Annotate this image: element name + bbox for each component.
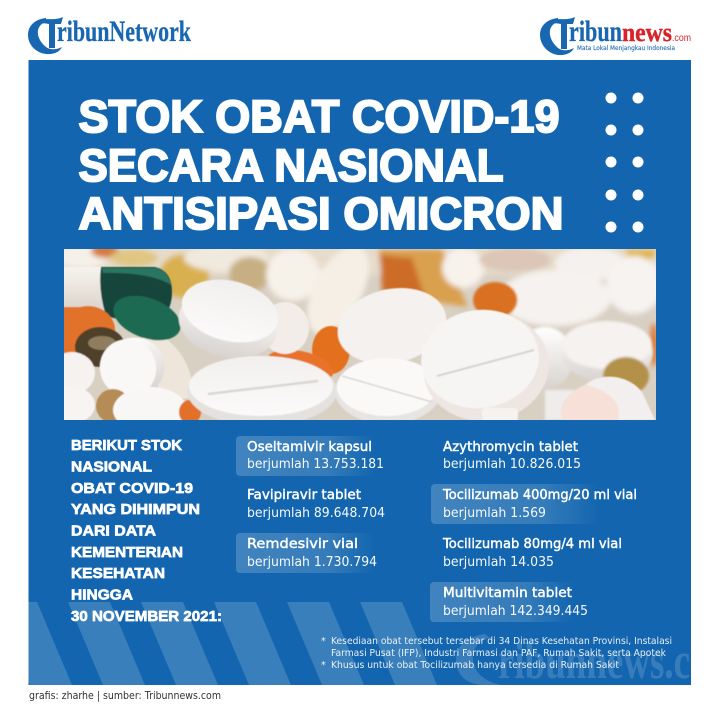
photo: pills — [64, 249, 656, 420]
title: ANTISIPASI OMICRON — [78, 188, 564, 239]
center tablets — [336, 287, 447, 362]
footnotes: * — [321, 660, 326, 671]
item: Azythromycin: Azythromycin tablet — [443, 439, 578, 455]
orange tablet — [80, 306, 116, 332]
footnotes: Khusus untuk obat Tocilizumab hanya tersedia di Rumah Sakit — [331, 660, 619, 671]
logo: Tribunnews: news — [622, 18, 672, 47]
dots decoration — [606, 92, 644, 232]
orange mid — [312, 326, 350, 374]
watermark — [456, 634, 690, 685]
item: Tocilizumab 80mg: berjumlah 14.035 — [443, 554, 554, 570]
pink capsule — [561, 384, 623, 420]
footnotes: * — [321, 636, 326, 647]
item: Tocilizumab 80mg — [442, 536, 622, 570]
intro text: HINGGA — [71, 586, 133, 604]
intro text: BERIKUT STOK — [71, 437, 182, 454]
item: Tocilizumab 80mg: Tocilizumab 80mg/4 ml vial — [442, 536, 622, 552]
intro text: YANG DIHIMPUN — [71, 501, 200, 518]
item: Multivitamin: berjumlah 142.349.445 — [443, 603, 588, 619]
logo: Tribunnews: .com — [672, 33, 691, 44]
intro text — [71, 437, 222, 625]
logo: Tribunnews — [540, 15, 691, 55]
title: STOK OBAT COVID-19 — [78, 91, 560, 142]
intro text: NASIONAL — [71, 458, 152, 476]
left white tablets — [64, 351, 96, 390]
behind white — [269, 302, 310, 355]
item: Remdesivir — [236, 533, 377, 573]
intro text: KESEHATAN — [71, 565, 165, 582]
logo: Tribunnews: Mata Lokal Menjangkau Indonesia — [577, 44, 675, 52]
brown ball — [75, 327, 125, 367]
item: Tocilizumab 400mg: berjumlah 1.569 — [443, 505, 546, 521]
item: Oseltamivir — [236, 436, 384, 476]
item: Favipiravir: berjumlah 89.648.704 — [247, 505, 385, 521]
item: Azythromycin — [443, 439, 581, 472]
footnotes — [321, 636, 672, 671]
item: Tocilizumab 400mg — [431, 484, 637, 524]
title — [78, 91, 564, 239]
intro text: KEMENTERIAN — [71, 544, 183, 561]
item: Multivitamin: Multivitamin tablet — [443, 585, 572, 601]
item: Oseltamivir: berjumlah 13.753.181 — [247, 456, 384, 472]
intro text: DARI DATA — [71, 522, 156, 540]
footnotes: Farmasi Pusat (IFP), Industri Farmasi dan PAF, Rumah Sakit, serta Apotek — [331, 648, 666, 659]
item: Multivitamin — [430, 582, 588, 622]
tablet big top — [178, 306, 274, 358]
logo: TribunNetwork — [28, 15, 191, 54]
item: Tocilizumab 400mg: Tocilizumab 400mg/20 ml vial — [442, 487, 637, 503]
logo: Tribunnews: ribun — [569, 15, 622, 48]
item: Azythromycin: berjumlah 10.826.015 — [443, 456, 581, 472]
item: Remdesivir: berjumlah 1.730.794 — [247, 554, 377, 570]
item: Favipiravir — [247, 487, 385, 521]
item: Oseltamivir: Oseltamivir kapsul — [247, 439, 372, 455]
item: Favipiravir: Favipiravir tablet — [247, 487, 361, 503]
green capsule — [64, 266, 106, 312]
title: SECARA NASIONAL — [78, 140, 504, 191]
item: Remdesivir: Remdesivir vial — [247, 536, 358, 552]
capsule 2 — [142, 337, 192, 399]
intro text: 30 NOVEMBER 2021: — [71, 608, 222, 625]
intro text: OBAT COVID-19 — [71, 480, 193, 497]
footnotes: Kesediaan obat tersebut tersebar di 34 Dinas Kesehatan Provinsi, Instalasi — [331, 636, 672, 647]
logo: TribunNetwork: ribunNetwork — [57, 15, 191, 48]
credit line: grafis: zharhe | sumber: Tribunnews.com — [29, 689, 221, 702]
